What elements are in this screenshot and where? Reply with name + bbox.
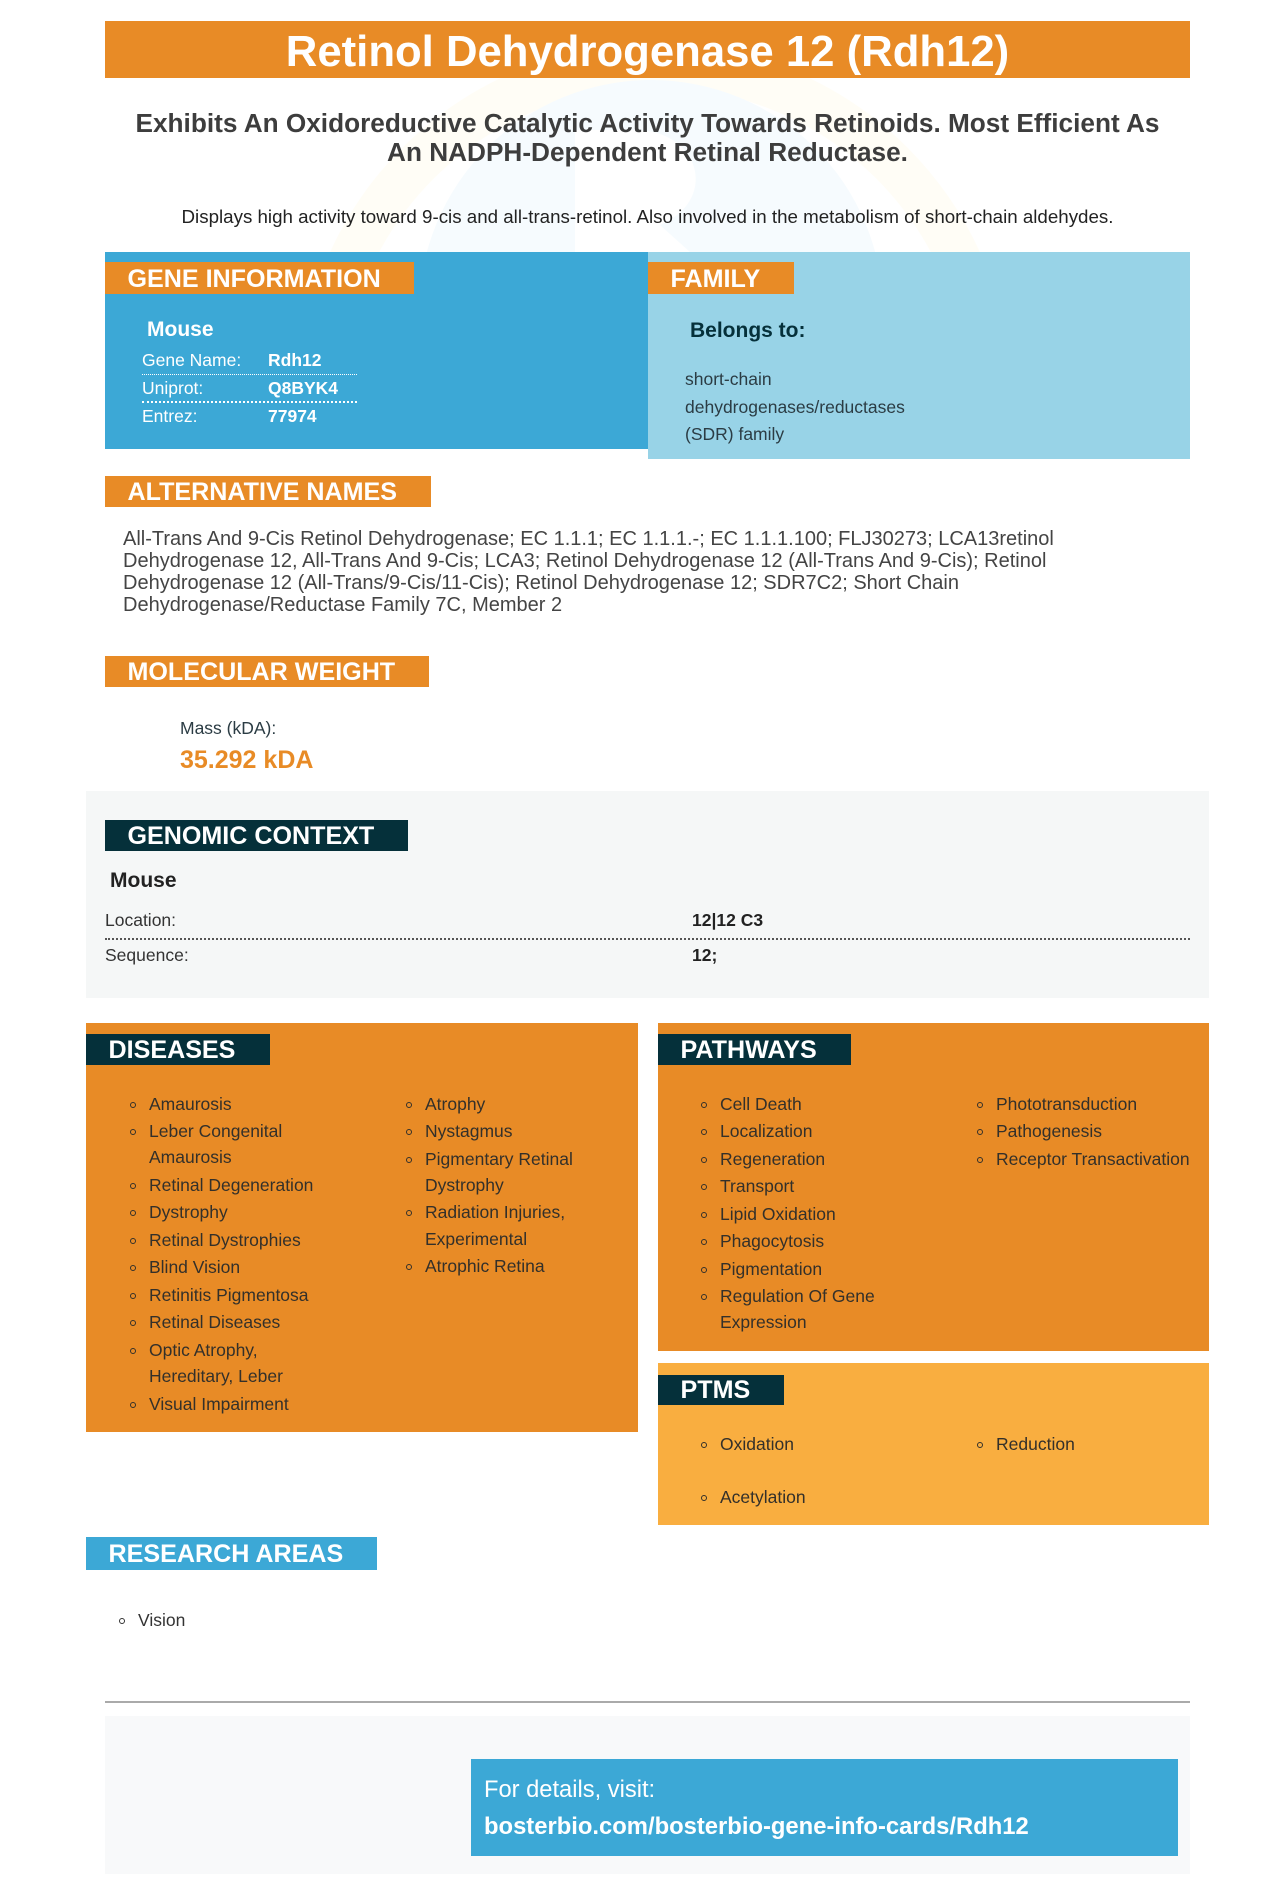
family description: (SDR) family — [685, 424, 784, 444]
disease list: Visual Impairment — [149, 1394, 289, 1414]
pathway list: Receptor Transactivation — [996, 1149, 1190, 1169]
disease list: Nystagmus — [425, 1121, 513, 1141]
heading: diseases: DISEASES — [108, 1036, 235, 1064]
heading: family — [648, 262, 794, 294]
alternative names text: Dehydrogenase/Reductase Family 7C, Member 2 — [123, 594, 562, 616]
subtitle — [136, 108, 1159, 167]
species label: Mouse — [147, 318, 214, 341]
disease list: Amaurosis — [149, 1147, 232, 1167]
heading: ptms: PTMS — [680, 1376, 750, 1404]
mass label: Mass (kDA): — [180, 718, 276, 738]
disease list: Retinitis Pigmentosa — [149, 1285, 309, 1305]
disease list: Dystrophy — [425, 1175, 504, 1195]
disease list: Retinal Dystrophies — [149, 1230, 301, 1250]
alternative names text: All-Trans And 9-Cis Retinol Dehydrogenase; EC 1.1.1; EC 1.1.1.-; EC 1.1.1.100; FLJ30273; LCA13retinol — [123, 528, 1054, 550]
disease list: Retinal Degeneration — [149, 1175, 313, 1195]
panel: ptms — [658, 1363, 1209, 1525]
title — [105, 21, 1190, 78]
entrez row: 77974 — [268, 406, 317, 426]
disease list — [130, 1094, 573, 1414]
species label: Mouse — [110, 869, 177, 892]
disease list: Radiation Injuries, — [425, 1202, 565, 1222]
pathway list: Expression — [720, 1312, 807, 1332]
panel: genomic context — [86, 791, 1209, 998]
location row: 12|12 C3 — [692, 910, 763, 930]
pathway list: Lipid Oxidation — [720, 1204, 836, 1224]
panel: pathways — [658, 1023, 1209, 1351]
ptm list: Oxidation — [720, 1434, 794, 1454]
heading: alternative names: ALTERNATIVE NAMES — [128, 478, 397, 506]
pathway list: Cell Death — [720, 1094, 802, 1114]
heading: pathways — [658, 1034, 851, 1065]
panel: family — [648, 252, 1190, 459]
description: Displays high activity toward 9-cis and all-trans-retinol. Also involved in the metabolism of short-chain aldehydes. — [182, 206, 1113, 227]
gene name row: Rdh12 — [268, 350, 321, 370]
pathway list: Pathogenesis — [996, 1121, 1102, 1141]
heading: molecular weight: MOLECULAR WEIGHT — [128, 658, 395, 686]
footer rule — [105, 1701, 1190, 1703]
family description — [685, 369, 905, 444]
alternative names text: Dehydrogenase 12, All-Trans And 9-Cis; LCA3; Retinol Dehydrogenase 12 (All-Trans And 9-Cis); Retinol — [123, 550, 1046, 572]
heading: research areas — [86, 1537, 377, 1570]
uniprot row — [142, 376, 357, 403]
disease list: Amaurosis — [149, 1094, 232, 1114]
belongs to label: Belongs to: — [690, 319, 806, 342]
heading: family: FAMILY — [670, 265, 760, 293]
pathway list — [701, 1094, 1190, 1332]
disease list: Atrophy — [425, 1094, 485, 1114]
gene name row — [142, 348, 357, 375]
heading: gene information: GENE INFORMATION — [128, 265, 381, 293]
disease list: Optic Atrophy, — [149, 1340, 258, 1360]
disease list: Pigmentary Retinal — [425, 1149, 573, 1169]
alternative names text — [123, 528, 1054, 616]
heading: genomic context: GENOMIC CONTEXT — [128, 822, 374, 850]
research areas list: Vision — [138, 1610, 185, 1630]
location row: Location: — [105, 910, 176, 930]
disease list: Atrophic Retina — [425, 1256, 545, 1276]
sequence row — [105, 945, 717, 965]
pathway list: Regeneration — [720, 1149, 825, 1169]
disease list: Hereditary, Leber — [149, 1366, 283, 1386]
disease list: Experimental — [425, 1229, 527, 1249]
disease list: Dystrophy — [149, 1202, 228, 1222]
uniprot row: Uniprot: — [142, 378, 203, 398]
pathway list: Phototransduction — [996, 1094, 1137, 1114]
heading: ptms — [658, 1375, 784, 1405]
pathway list: Transport — [720, 1176, 794, 1196]
pathway list: Phagocytosis — [720, 1231, 824, 1251]
entrez row — [142, 406, 317, 426]
heading: diseases — [86, 1034, 270, 1065]
disease list: Retinal Diseases — [149, 1312, 280, 1332]
ptm list: Acetylation — [720, 1487, 806, 1507]
visit label: For details, visit: — [484, 1777, 655, 1803]
panel: gene information — [105, 252, 648, 449]
pathway list: Localization — [720, 1121, 812, 1141]
disease list: Blind Vision — [149, 1257, 240, 1277]
family description: dehydrogenases/reductases — [685, 396, 905, 416]
ptm list — [701, 1434, 1075, 1507]
url: bosterbio.com/bosterbio-gene-info-cards/Rdh12 — [484, 1813, 1029, 1840]
title: Retinol Dehydrogenase 12 (Rdh12) — [286, 27, 1009, 76]
subtitle: An NADPH-Dependent Retinal Reductase. — [387, 137, 908, 167]
pathway list: Regulation Of Gene — [720, 1286, 875, 1306]
family description: short-chain — [685, 369, 772, 389]
heading: research areas: RESEARCH AREAS — [108, 1540, 343, 1568]
uniprot row: Q8BYK4 — [268, 378, 338, 398]
background watermark — [330, 78, 980, 252]
sequence row: 12; — [692, 945, 717, 965]
heading: pathways: PATHWAYS — [680, 1036, 817, 1064]
location row — [105, 908, 1190, 940]
subtitle: Exhibits An Oxidoreductive Catalytic Activity Towards Retinoids. Most Efficient As — [136, 108, 1159, 138]
callout: details link — [471, 1759, 1178, 1856]
mass value: 35.292 kDA — [180, 746, 313, 774]
entrez row: Entrez: — [142, 406, 197, 426]
sequence row: Sequence: — [105, 945, 189, 965]
disease list: Leber Congenital — [149, 1121, 282, 1141]
ptm list: Reduction — [996, 1434, 1075, 1454]
pathway list: Pigmentation — [720, 1259, 822, 1279]
panel: diseases — [86, 1023, 638, 1432]
alternative names text: Dehydrogenase 12 (All-Trans/9-Cis/11-Cis); Retinol Dehydrogenase 12; SDR7C2; Short Chain — [123, 572, 959, 594]
footer panel — [105, 1716, 1190, 1874]
gene name row: Gene Name: — [142, 350, 241, 370]
